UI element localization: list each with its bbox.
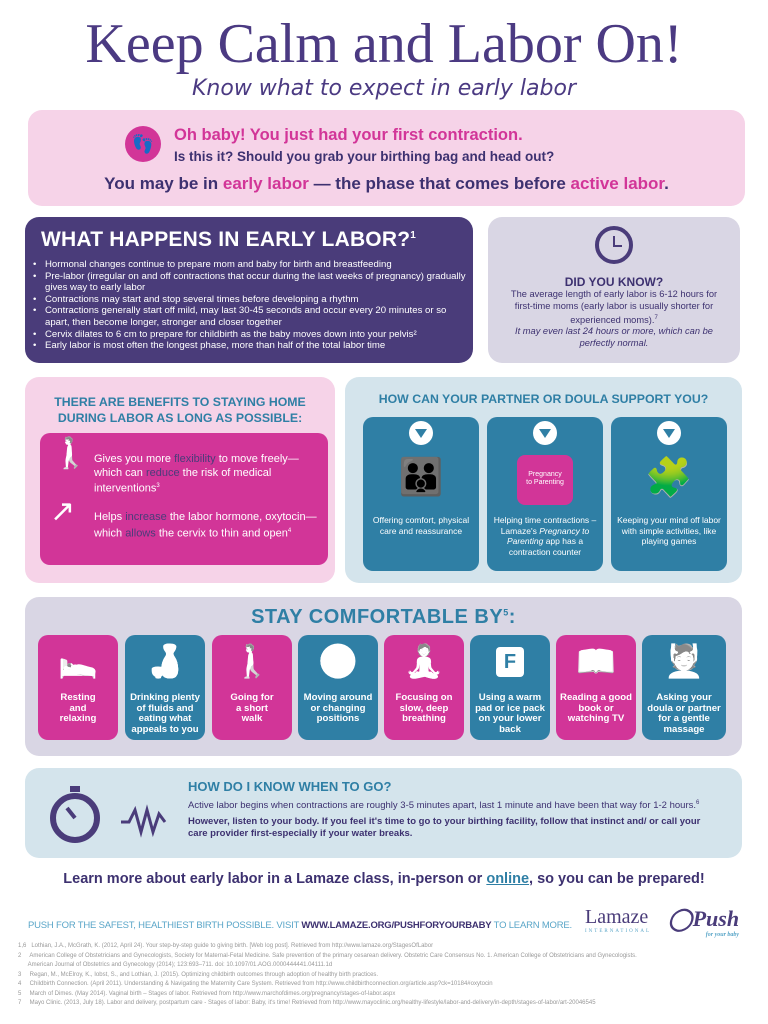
bullet list: Cervix dilates to 6 cm to prepare for childbirth as the baby moves down into your pelvis² (45, 329, 417, 340)
card: breathing: 🧘 (404, 643, 444, 679)
logo: push: for your baby (706, 932, 739, 938)
title: Keep Calm and Labor On! (85, 13, 683, 75)
heading: HOW DO I KNOW WHEN TO GO? (188, 779, 391, 794)
card: reading (556, 635, 636, 740)
text (188, 800, 700, 839)
card: resting (38, 635, 118, 740)
references: 3 Regan, M., McElroy, K., Iobst, S., and Lothian, J. (2015). Optimizing childbirth outcomes through adoption of healthy birth practices. (18, 972, 378, 978)
references: 4 Childbirth Connection. (April 2011). Understanding & Navigating the Maternity Care System. Retrieved from http://www.childbirthconnection.org/article.asp?ck=10184#oxytocin (18, 981, 493, 987)
panel: intro (28, 110, 745, 206)
bullet list (33, 259, 466, 351)
heading (54, 395, 306, 425)
card: walk: 🚶 (232, 643, 272, 679)
card: comfort: Offering comfort, physical care and reassurance (373, 515, 469, 536)
benefit: oxytocin: Helps increase the labor hormone, oxytocin—which allows the cervix to thin and open4 (94, 511, 317, 539)
card: resting: Resting (60, 692, 96, 703)
bullet list: Hormonal changes continue to prepare mom and baby for birth and breastfeeding (45, 259, 392, 270)
panel: what happens in early labor (25, 217, 473, 363)
references: American Journal of Obstetrics and Gynecology (2014); 123:693–711. doi: 10.1097/01.AOG.0000444441.04111.1d (28, 962, 332, 968)
card: breathing: Focusing on slow, deep breathing (395, 692, 453, 724)
card: drinking: 🍶 (145, 643, 185, 679)
text (511, 289, 717, 348)
card: comfort: 👪 (399, 456, 443, 497)
card: massage: 💆 (664, 643, 704, 679)
card: drinking: Drinking plenty of fluids and eating what appeals to you (130, 692, 200, 735)
references: 7 Mayo Clinic. (2013, July 18). Labor and delivery, postpartum care - Stages of labor: Baby, it's time! Retrieved from http://www.mayoclinic.org/healthy-lifestyle/labor-and-delivery/in-depth/stages-of-labor/art-20046545 (18, 1000, 596, 1006)
benefit: flexibility: Gives you more flexibility to move freely—which can reduce the risk of medical interventions3 (94, 453, 299, 495)
card: timing contractions: Pregnancy (528, 471, 562, 478)
icon: footprints (125, 126, 161, 162)
icon: stopwatch (50, 786, 166, 843)
card: moving: ⚪ (318, 643, 358, 679)
references: 1,6 Lothian, J.A., McGrath, K. (2012, April 24). Your step-by-step guide to giving birth. [Web log post]. Retrieved from http://www.lamaze.org/StagesOfLabor (18, 943, 433, 949)
card: walk (212, 635, 292, 740)
logo: push: ◯Push (668, 906, 739, 931)
icon: footprints: 👣 (132, 134, 154, 154)
card: walk: a short (236, 703, 268, 714)
logo: lamaze: INTERNATIONAL (585, 929, 651, 934)
card: timing contractions: to Parenting (526, 479, 564, 486)
card: timing contractions (487, 417, 603, 571)
references (18, 942, 637, 1006)
card: walk: walk (242, 713, 262, 724)
bullet list: Contractions may start and stop several times before developing a rhythm (45, 294, 359, 305)
card: comfort (363, 417, 479, 571)
card: warm pad (470, 635, 550, 740)
footer: push line: PUSH FOR THE SAFEST, HEALTHIEST BIRTH POSSIBLE. VISIT WWW.LAMAZE.ORG/PUSHFORYOURBABY TO LEARN MORE. (28, 920, 572, 931)
card: breathing (384, 635, 464, 740)
card: keeping mind off: Keeping your mind off labor with simple activities, like playing games (617, 515, 721, 546)
card: walk: Going for (230, 692, 274, 703)
references: 5 March of Dimes. (May 2014). Vaginal birth – Stages of labor. Retrieved from http://www.marchofdimes.org/pregnancy/stages-of-labor.aspx (18, 990, 395, 996)
text: It may even last 24 hours or more, which can be perfectly normal. (515, 326, 713, 348)
card: moving (298, 635, 378, 740)
logo: lamaze: Lamaze (585, 906, 648, 928)
card: massage: Asking your doula or partner for a gentle massage (647, 692, 721, 735)
bullet list: Contractions generally start off mild, may last 30-45 seconds and occur every 20 minutes or so apart, then become longer, stronger and closer together (45, 305, 446, 328)
heading: THERE ARE BENEFITS TO STAYING HOME (54, 395, 306, 409)
text: Active labor begins when contractions are roughly 3-5 minutes apart, last 1 minute and have been that way for 1-2 hours.6 (188, 800, 699, 811)
text: The average length of early labor is 6-12 hours for first-time moms (early labor is usually shorter for experienced moms).7 (511, 289, 717, 325)
panel: partner or doula support (345, 377, 742, 583)
card: keeping mind off (611, 417, 727, 571)
card: warm pad: Using a warm pad or ice pack on your lower back (475, 692, 545, 735)
benefits list (40, 433, 328, 565)
card: moving: Moving around or changing positions (304, 692, 372, 724)
panel: did you know (488, 217, 740, 363)
bullet list: Early labor is most often the longest phase, more than half of the total labor time (45, 340, 385, 351)
icon: clock (595, 226, 633, 264)
text: learn more: Learn more about early labor in a Lamaze class, in-person or online, so you can be prepared! (63, 871, 705, 887)
card: drinking (125, 635, 205, 740)
heading: DURING LABOR AS LONG AS POSSIBLE: (58, 411, 302, 425)
card: resting: relaxing (60, 713, 96, 724)
heading: WHAT HAPPENS IN EARLY LABOR?1 (41, 228, 416, 251)
panel: stay comfortable (25, 597, 742, 756)
card: timing contractions: Helping time contractions – Lamaze's Pregnancy to Parenting app has a contraction counter (494, 515, 596, 556)
card: resting: and (69, 703, 87, 714)
heading: DID YOU KNOW? (565, 275, 663, 289)
panel: when to go (25, 768, 742, 858)
heading: STAY COMFORTABLE BY5: (251, 606, 516, 628)
heading: first contraction: Oh baby! You just had your first contraction. (174, 126, 523, 144)
text: early labor: You may be in early labor — the phase that comes before active labor. (104, 174, 669, 193)
card: reading: Reading a good book or watching TV (560, 692, 632, 724)
card: warm pad: F (504, 651, 516, 673)
text: However, listen to your body. If you feel it's time to go to your birthing facility, follow that instinct and/ or call your care provider first-especially if your water breaks. (188, 816, 700, 839)
panel: benefits of staying home (25, 377, 335, 583)
text: questions: Is this it? Should you grab your birthing bag and head out? (174, 149, 554, 164)
heading: HOW CAN YOUR PARTNER OR DOULA SUPPORT YOU? (379, 392, 708, 406)
card: resting: 🛌 (58, 643, 98, 679)
card: keeping mind off: 🧩 (645, 457, 693, 499)
bullet list: Pre-labor (irregular on and off contractions that occur during the last weeks of pregnancy) gradually gives way to early labor (45, 271, 466, 293)
icon: walking: 🚶 (52, 437, 89, 470)
subtitle: Know what to expect in early labor (192, 76, 576, 101)
references: 2 American College of Obstetricians and Gynecologists, Society for Maternal-Fetal Medicine. Safe prevention of the primary cesarean delivery. Obstetric Care Consensus No. 1. American College of Obstetricians and Gynecologists. (18, 952, 637, 958)
card: massage (642, 635, 726, 740)
icon: arrow up: ↗ (50, 495, 75, 528)
card: reading: 📖 (576, 643, 616, 679)
